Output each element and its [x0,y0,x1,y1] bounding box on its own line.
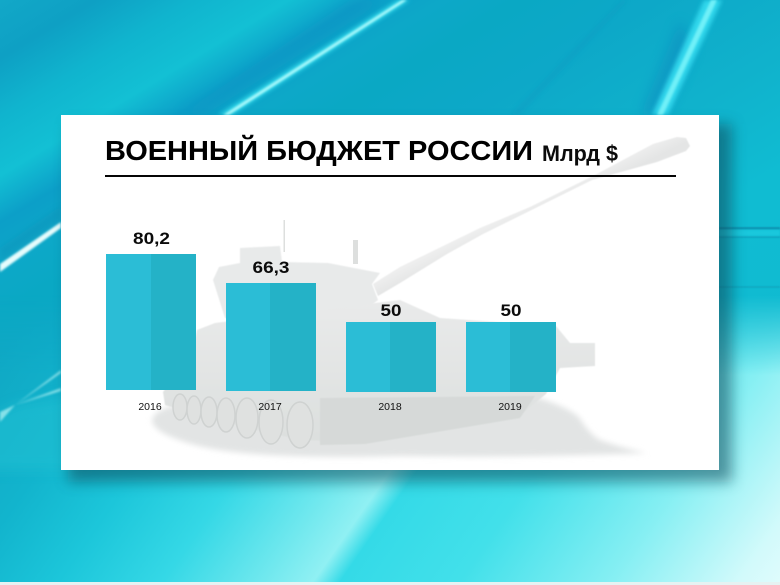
tank turret [213,246,380,322]
tank gun barrel [373,137,690,296]
bar 2016 [106,230,196,413]
title rule [105,175,676,177]
bar 2017: 66,3 [252,259,290,277]
title: Млрд $ [542,141,618,166]
bar 2018 [346,302,436,413]
title: ВОЕННЫЙ БЮДЖЕТ РОССИИ [105,135,533,166]
bar 2016: 2016 [138,401,162,413]
panel shadow [68,124,732,482]
bar 2017 [226,259,316,413]
tank wheels [173,394,313,448]
tank antenna and post [284,220,358,264]
bar 2018: 50 [380,302,402,320]
bar 2018: 2018 [378,401,402,413]
page bottom strip [0,582,780,585]
bar 2019: 50 [500,302,522,320]
tank hull [163,300,595,442]
bar chart [106,230,556,413]
white panel [61,115,719,470]
bar 2017: 2017 [258,401,282,413]
bar 2019 [466,302,556,413]
tank tracks [320,396,535,445]
tank illustration [152,137,690,457]
bar 2016: 80,2 [133,230,170,248]
tank ground shadow [152,395,647,457]
bar 2019: 2019 [498,401,522,413]
